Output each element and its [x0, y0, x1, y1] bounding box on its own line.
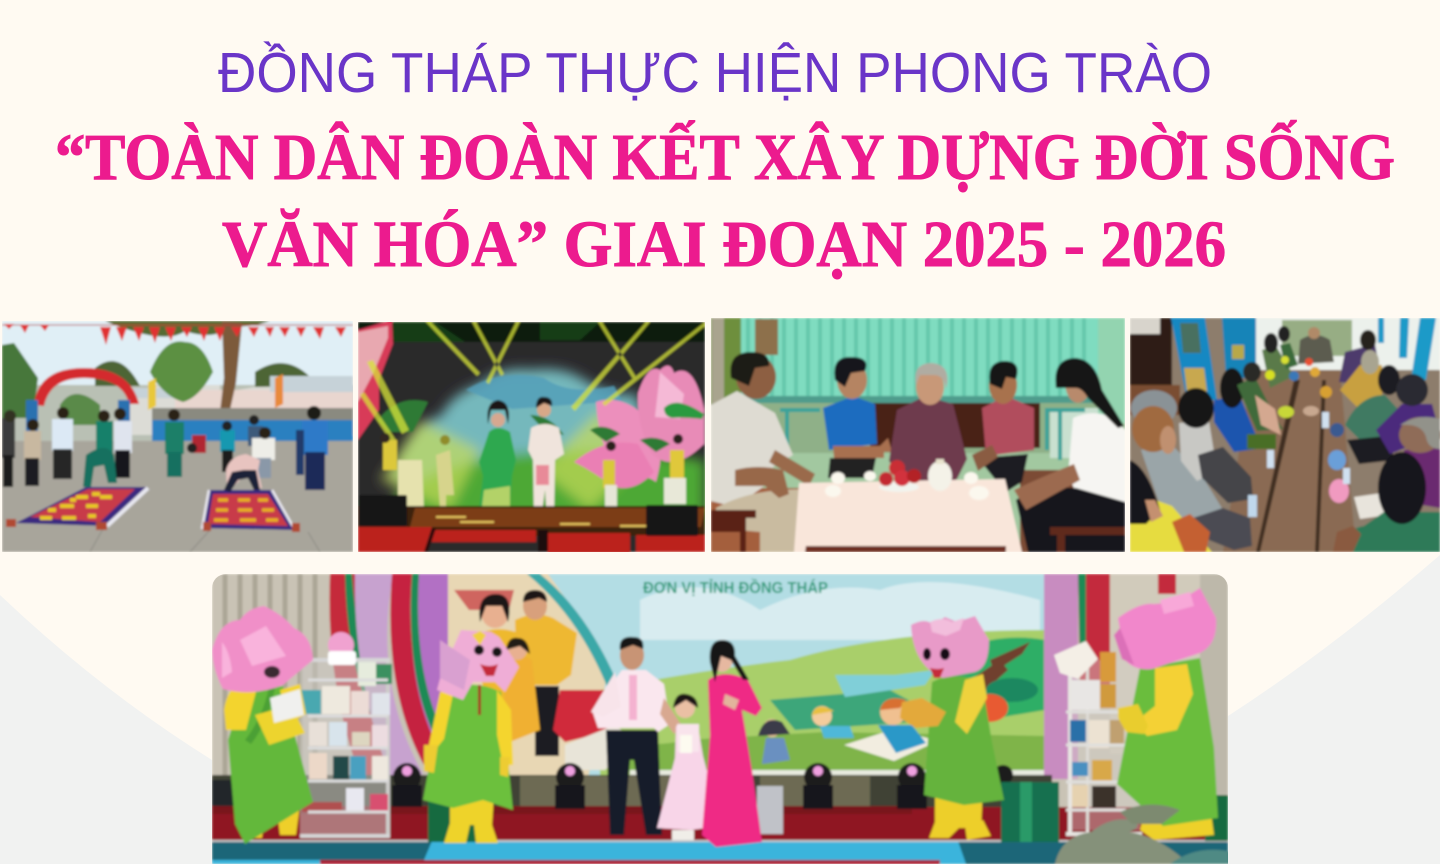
- leaf props: [378, 400, 670, 452]
- woman singer in green dress: [478, 426, 516, 507]
- stage speakers: [359, 495, 407, 526]
- stage front: [212, 840, 1228, 864]
- woman in yellow: [1130, 498, 1212, 552]
- woman in green: [1344, 394, 1398, 440]
- male presenter: [591, 637, 682, 835]
- backdrop children and book: [758, 642, 1038, 764]
- women further along: [1237, 377, 1283, 431]
- fan: [1131, 390, 1177, 426]
- couple portrait on backdrop: [478, 590, 635, 770]
- woman in white: [1179, 421, 1217, 481]
- title line 1: ĐỒNG THÁP THỰC HIỆN PHONG TRÀO: [218, 40, 1212, 105]
- far presenter: [1298, 335, 1334, 364]
- young man in blue: [823, 357, 892, 478]
- long wooden table: [1223, 370, 1356, 552]
- mascot 4: [1114, 588, 1218, 840]
- man singer in white: [528, 424, 564, 520]
- table with cloth: [794, 479, 1022, 552]
- mascot 2: [423, 630, 519, 843]
- female presenter in pink: [702, 640, 762, 847]
- woman in yellow: [1340, 365, 1382, 408]
- stools: [711, 510, 756, 552]
- book rack right: [1054, 641, 1142, 836]
- seated women left side: [1130, 326, 1298, 552]
- lotus flower: [596, 400, 661, 482]
- backdrop title: ĐƠN VỊ TỈNH ĐỒNG THÁP: [643, 578, 828, 597]
- bench and railing: [730, 403, 1098, 453]
- gray box: [757, 786, 783, 834]
- photo: stage performance with lotus: [358, 320, 705, 553]
- cloud backdrop: [380, 369, 705, 525]
- mascot 1: [212, 606, 313, 844]
- seated women right side: [1298, 327, 1440, 552]
- man in white shirt: [711, 352, 816, 552]
- woman in purple: [1347, 436, 1395, 464]
- photo: family conversation at a table: [711, 318, 1125, 552]
- left mat: [16, 487, 148, 526]
- people on the yard: [2, 418, 15, 458]
- mascot 3: [900, 616, 1004, 840]
- fruit plate and teapot: [825, 459, 989, 500]
- boy in red shirt: [972, 361, 1034, 492]
- photo: folk game on the yard: [2, 321, 355, 552]
- light beams: [360, 321, 705, 443]
- woman in green check: [1340, 512, 1440, 552]
- girl in white dress: [657, 694, 721, 840]
- lotus leaves foreground: [1055, 804, 1240, 864]
- photo: stage with lotus mascots: [212, 574, 1240, 864]
- green barrels: [1001, 782, 1059, 842]
- woman in white shirt: [1014, 358, 1125, 552]
- woman in blue: [1212, 398, 1256, 453]
- curtain left: [225, 574, 315, 794]
- backing dancers: [398, 460, 424, 520]
- backdrop sky and field: [448, 574, 1048, 779]
- title: [55, 40, 1395, 281]
- elderly woman: [889, 363, 967, 485]
- table objects: [1248, 356, 1350, 517]
- gray-haired woman: [1404, 446, 1440, 508]
- right stage panel: [1044, 574, 1078, 779]
- right mat: [202, 490, 295, 530]
- red stage floor: [212, 807, 1228, 842]
- spotlights: [392, 763, 1013, 809]
- stage floor: [358, 506, 705, 536]
- woman in gray: [1140, 447, 1223, 519]
- dark band: [212, 775, 1052, 807]
- book rack left: [300, 632, 392, 838]
- title line 3: VĂN HÓA” GIAI ĐOẠN 2025 - 2026: [222, 208, 1226, 281]
- stage swooshes: [329, 574, 425, 789]
- corrugated wall: [741, 318, 1098, 398]
- photo: women sitting at a long table: [1130, 318, 1440, 552]
